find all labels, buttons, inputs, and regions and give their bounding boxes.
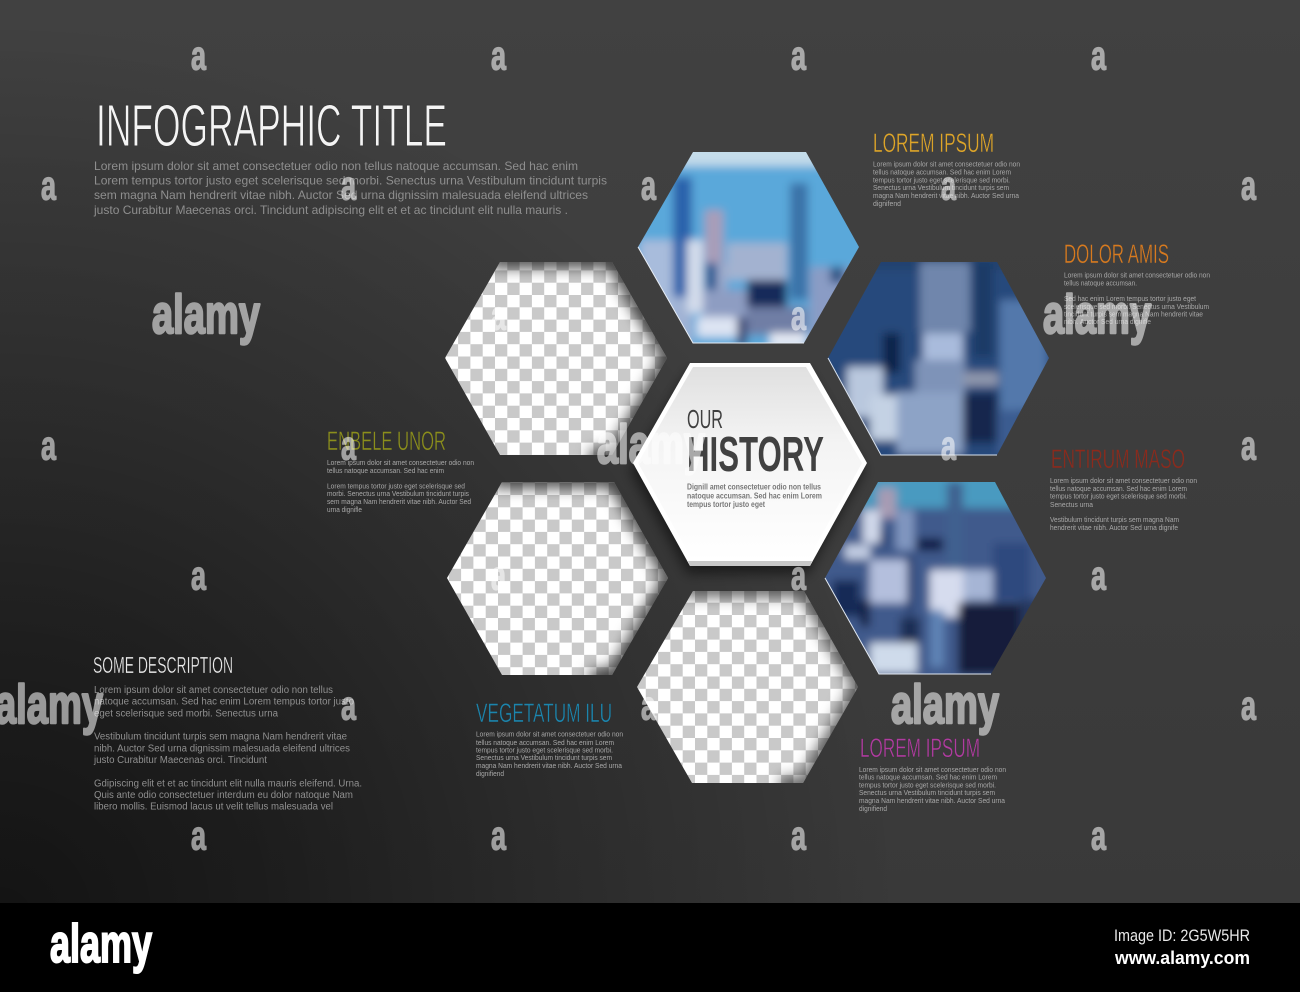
description body: eget scelerisque sed morbi. Senectus urna — [94, 708, 278, 720]
callout: vegetatum ilu (blue): dignifiend — [476, 769, 504, 778]
hexagon photo: blue skyline — [638, 152, 859, 344]
callout: lorem ipsum (magenta): magna Nam hendrerit vitae nibh. Auctor Sed urna — [859, 796, 1005, 805]
heading: our: OUR — [687, 404, 723, 434]
watermark pattern: a — [791, 812, 807, 858]
watermark pattern: alamy — [1043, 283, 1151, 345]
description body: natoque accumsan. Sed hac enim Lorem tempus tortor justo — [94, 696, 354, 708]
photo edge highlight — [825, 578, 991, 674]
callout: lorem ipsum (yellow): Senectus urna Vestibulum tincidunt turpis sem — [873, 183, 1009, 192]
intro paragraph: sem magna Nam hendrerit vitae nibh. Auctor Sed urna dignissim malesuada eleifend ultrices — [94, 188, 588, 202]
description heading: SOME DESCRIPTION — [93, 652, 233, 678]
callout: vegetatum ilu (blue): VEGETATUM ILU — [476, 698, 612, 728]
description body: Vestibulum tincidunt turpis sem magna Nam hendrerit vitae — [94, 732, 347, 742]
watermark pattern: a — [341, 162, 357, 208]
center hexagon: our history — [630, 363, 867, 574]
description body: Quis ante odio consectetuer interdum eu dolor natoque Nam — [94, 790, 353, 801]
callout: dolor amis (orange): Sed hac enim Lorem tempus tortor justo eget — [1064, 294, 1196, 303]
callout: enbele unor (olive): ENBELE UNOR — [327, 426, 446, 456]
callout: vegetatum ilu (blue): tempus tortor justo eget scelerisque sed morbi. — [476, 746, 613, 754]
watermark pattern: a — [341, 422, 357, 468]
callout: entirum maso (red): Senectus urna — [1050, 500, 1093, 509]
image id: Image ID: 2G5W5HR — [1114, 926, 1250, 945]
watermark pattern: a — [1091, 552, 1107, 598]
callout: enbele unor (olive): sem magna Nam hendrerit vitae nibh. Auctor Sed — [327, 497, 471, 506]
callout: enbele unor (olive): tellus natoque accumsan. Sed hac enim — [327, 466, 444, 475]
watermark pattern: a — [791, 32, 807, 78]
photo edge highlight — [828, 358, 997, 455]
watermark pattern: a — [41, 162, 57, 208]
watermark pattern: a — [1241, 162, 1257, 208]
watermark pattern: a — [191, 552, 207, 598]
description body: nibh. Auctor Sed urna dignissim malesuada eleifend ultrices — [94, 744, 350, 754]
callout: lorem ipsum (magenta): LOREM IPSUM — [860, 733, 980, 763]
callout: entirum maso (red): Vestibulum tincidunt turpis sem magna Nam — [1050, 515, 1179, 524]
callout: vegetatum ilu (blue) — [476, 698, 623, 778]
callout: lorem ipsum (magenta): dignifiend — [859, 804, 887, 813]
callout: vegetatum ilu (blue): tellus natoque accumsan. Sed hac enim Lorem — [476, 738, 614, 747]
callout: entirum maso (red): hendrerit vitae nibh. Auctor Sed urna dignife — [1050, 523, 1178, 532]
watermark pattern: a — [1091, 32, 1107, 78]
callout: dolor amis (orange): tellus natoque accumsan. — [1064, 278, 1137, 288]
callout: dolor amis (orange): DOLOR AMIS — [1064, 239, 1169, 269]
heading: history: HISTORY — [687, 428, 824, 482]
callout: entirum maso (red): tempus tortor justo eget scelerisque sed morbi. — [1050, 492, 1187, 500]
watermark pattern: a — [641, 682, 657, 728]
watermark pattern: a — [1241, 682, 1257, 728]
watermark pattern: a — [491, 812, 507, 858]
callout: vegetatum ilu (blue): Lorem ipsum dolor sit amet consectetuer odio non — [476, 730, 623, 738]
callout: entirum maso (red): tellus natoque accumsan. Sed hac enim Lorem — [1050, 484, 1187, 493]
callout: enbele unor (olive): Lorem tempus tortor justo eget scelerisque sed — [327, 482, 465, 490]
center description: natoque accumsan. Sed hac enim Lorem — [687, 492, 822, 500]
callout: lorem ipsum (yellow): LOREM IPSUM — [873, 128, 994, 158]
callout: lorem ipsum (yellow): magna Nam hendrerit vitae nibh. Auctor Sed urna — [873, 191, 1019, 200]
callout: dolor amis (orange) — [1064, 239, 1210, 326]
callout: lorem ipsum (yellow): dignifend — [873, 199, 901, 208]
watermark pattern: alamy — [891, 673, 999, 735]
watermark pattern: a — [791, 292, 807, 338]
hexagon photo: blurred towers — [828, 262, 1049, 456]
callout: lorem ipsum (yellow): Lorem ipsum dolor sit amet consectetuer odio non — [873, 160, 1020, 168]
watermark pattern: a — [191, 812, 207, 858]
watermark pattern: a — [1091, 812, 1107, 858]
hexagon photo: city aerial — [824, 482, 1046, 674]
description body — [93, 685, 362, 812]
center description: Dignill amet consectetuer odio non tellus — [687, 482, 821, 492]
hexagon placeholder: bottom — [637, 587, 863, 787]
intro paragraph: justo Curabitur Maecenas orci. Tincidunt adipiscing elit et et ac tincidunt elit nulla mauris . — [93, 203, 568, 217]
watermark pattern: a — [641, 162, 657, 208]
watermark pattern: a — [941, 162, 957, 208]
intro paragraph: Lorem tempus tortor justo eget scelerisque sed morbi. Senectus urna Vestibulum tincidunt turpis — [94, 174, 607, 188]
hexagon placeholder: upper left — [445, 258, 672, 459]
callout: lorem ipsum (magenta): Senectus urna Vestibulum tincidunt turpis sem — [859, 788, 995, 797]
callout: lorem ipsum (yellow) — [873, 128, 1020, 208]
callout: dolor amis (orange): Lorem ipsum dolor sit amet consectetuer odio non — [1064, 270, 1210, 280]
callout: dolor amis (orange): scelerisque sed morbi. Senectus urna Vestibulum — [1064, 302, 1209, 311]
callout: vegetatum ilu (blue): magna Nam hendrerit vitae nibh. Auctor Sed urna — [476, 761, 622, 770]
callout: enbele unor (olive): morbi. Senectus urna Vestibulum tincidunt turpis — [327, 489, 469, 498]
watermark pattern: a — [41, 422, 57, 468]
watermark pattern: a — [1241, 422, 1257, 468]
center description: tempus tortor justo eget — [687, 500, 765, 509]
callout: lorem ipsum (magenta): Lorem ipsum dolor sit amet consectetuer odio non — [859, 765, 1006, 774]
description body: justo Curabitur Maecenas orci. Tincidunt — [93, 755, 267, 766]
watermark pattern: a — [941, 422, 957, 468]
center description — [687, 482, 822, 509]
footer logo: alamy — [50, 914, 152, 974]
watermark pattern: a — [791, 552, 807, 598]
hexagon placeholder: lower left — [447, 478, 673, 679]
callout: lorem ipsum (magenta): tempus tortor justo eget scelerisque sed morbi. — [859, 780, 996, 790]
watermark pattern: a — [491, 32, 507, 78]
callout: vegetatum ilu (blue): Senectus urna Vestibulum tincidunt turpis sem — [476, 753, 612, 762]
description body: Gdipiscing elit et et ac tincidunt elit nulla mauris eleifend. Urna. — [94, 778, 362, 790]
intro paragraph: Lorem ipsum dolor sit amet consectetuer odio non tellus natoque accumsan. Sed hac enim — [94, 159, 578, 173]
panel: some description — [93, 652, 362, 812]
callout: enbele unor (olive): Lorem ipsum dolor sit amet consectetuer odio non — [327, 458, 474, 467]
callout: lorem ipsum (magenta): tellus natoque accumsan. Sed hac enim Lorem — [859, 772, 997, 782]
hexagon drop shadow — [630, 372, 865, 574]
intro paragraph — [93, 159, 607, 217]
website: www.alamy.com — [1114, 948, 1250, 968]
callout: entirum maso (red): ENTIRUM MASO — [1051, 444, 1185, 474]
watermark pattern: a — [341, 682, 357, 728]
photo edge highlight — [638, 247, 804, 343]
callout: lorem ipsum (yellow): tempus tortor justo eget scelerisque sed morbi. — [873, 176, 1010, 184]
watermark pattern: alamy — [152, 283, 260, 345]
callout: lorem ipsum (yellow): tellus natoque accumsan. Sed hac enim Lorem — [873, 168, 1011, 176]
footer bar — [0, 903, 1300, 992]
description body: Lorem ipsum dolor sit amet consectetuer odio non tellus — [94, 685, 333, 696]
callout: enbele unor (olive) — [327, 426, 474, 514]
description body: libero mollis. Euismod lacus ut velit tellus malesuada vel — [94, 802, 333, 812]
callout: entirum maso (red) — [1050, 444, 1197, 532]
title: INFOGRAPHIC TITLE — [96, 93, 447, 159]
callout: lorem ipsum (magenta) — [859, 733, 1006, 813]
callout: entirum maso (red): Lorem ipsum dolor sit amet consectetuer odio non — [1050, 476, 1197, 485]
watermark pattern: alamy — [597, 413, 705, 475]
callout: dolor amis (orange): tincidunt turpis sem magna Nam hendrerit vitae — [1064, 310, 1203, 318]
watermark pattern: a — [491, 552, 507, 598]
callout: enbele unor (olive): urna dignifle — [327, 505, 362, 514]
watermark pattern: a — [491, 292, 507, 338]
callout: dolor amis (orange): nibh. Auctor Sed urna dignifle — [1064, 317, 1151, 326]
hexagon body — [633, 363, 867, 566]
watermark pattern: a — [191, 32, 207, 78]
